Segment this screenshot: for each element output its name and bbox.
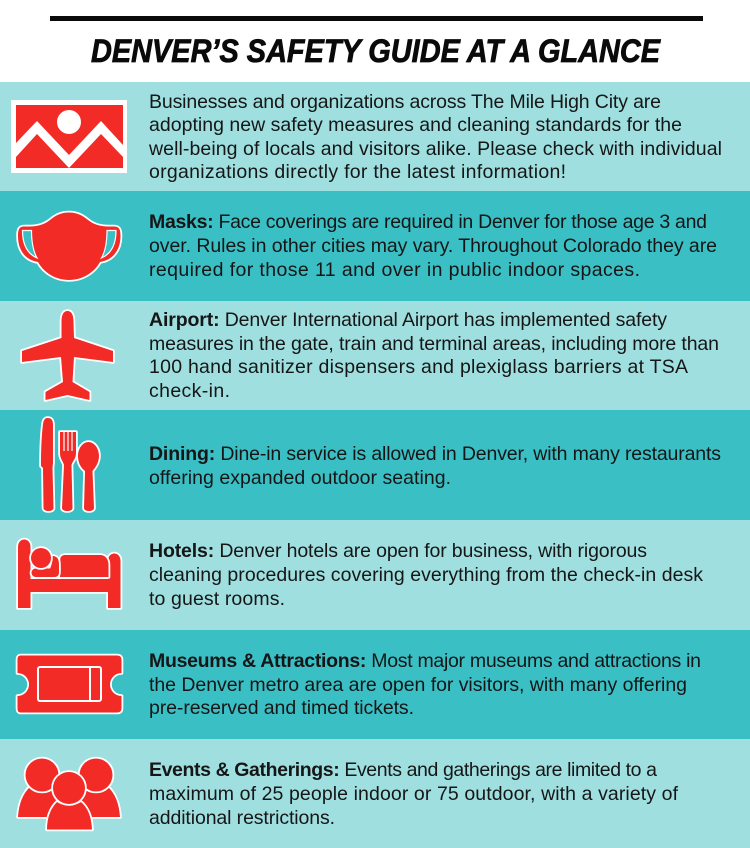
icon: bed [18, 540, 120, 608]
airport text [149, 309, 719, 402]
airport text: 100 hand sanitizer dispensers and plexiglass barriers at TSA [149, 356, 688, 378]
hotels text: Hotels: Denver hotels are open for business, with rigorous [149, 540, 647, 562]
icon: mountains and sun [11, 100, 127, 173]
airport text: check-in. [149, 380, 230, 402]
intro text: well-being of locals and visitors alike. Please check with individual [148, 138, 722, 160]
panel: events and gatherings [0, 739, 750, 848]
airport text: Airport: Denver International Airport has implemented safety [149, 309, 667, 331]
masks text: required for those 11 and over in public indoor spaces. [149, 259, 640, 281]
museums text: pre-reserved and timed tickets. [149, 697, 414, 719]
icon: knife, fork and spoon [41, 418, 99, 511]
masks text: Masks: Face coverings are required in Denver for those age 3 and [149, 211, 707, 233]
top rule [50, 16, 703, 21]
icon: airplane [22, 311, 113, 400]
panel: hotels [0, 520, 750, 630]
hotels text [149, 540, 703, 610]
panel: masks [0, 191, 750, 301]
events text: maximum of 25 people indoor or 75 outdoor, with a variety of [149, 783, 679, 805]
masks text [149, 211, 717, 281]
dining text: Dining: Dine-in service is allowed in Denver, with many restaurants [149, 443, 721, 465]
dining text: offering expanded outdoor seating. [149, 467, 451, 489]
icon: group of people [18, 758, 120, 830]
museums text: the Denver metro area are open for visitors, with many offering [149, 674, 687, 696]
events text: Events & Gatherings: Events and gatherings are limited to a [149, 759, 657, 781]
hotels text: cleaning procedures covering everything from the check-in desk [149, 564, 703, 586]
airport text: measures in the gate, train and terminal areas, including more than [149, 333, 719, 355]
dining text [149, 443, 721, 489]
panel: intro [0, 82, 750, 191]
events text [149, 759, 679, 829]
events text: additional restrictions. [149, 807, 335, 829]
masks text: over. Rules in other cities may vary. Throughout Colorado they are [149, 235, 717, 257]
icon: ticket [18, 656, 122, 712]
museums text: Museums & Attractions: Most major museums and attractions in [149, 650, 701, 672]
panel: dining [0, 410, 750, 520]
intro text: organizations directly for the latest information! [149, 161, 566, 183]
panel: museums and attractions [0, 630, 750, 739]
museums text [149, 650, 701, 719]
intro text: adopting new safety measures and cleaning standards for the [149, 114, 682, 136]
hotels text: to guest rooms. [149, 588, 285, 610]
icon: face mask [18, 212, 120, 280]
title: DENVER’S SAFETY GUIDE AT A GLANCE [91, 33, 661, 69]
intro text: Businesses and organizations across The Mile High City are [149, 91, 661, 113]
panel: airport [0, 301, 750, 410]
intro text [148, 91, 722, 183]
